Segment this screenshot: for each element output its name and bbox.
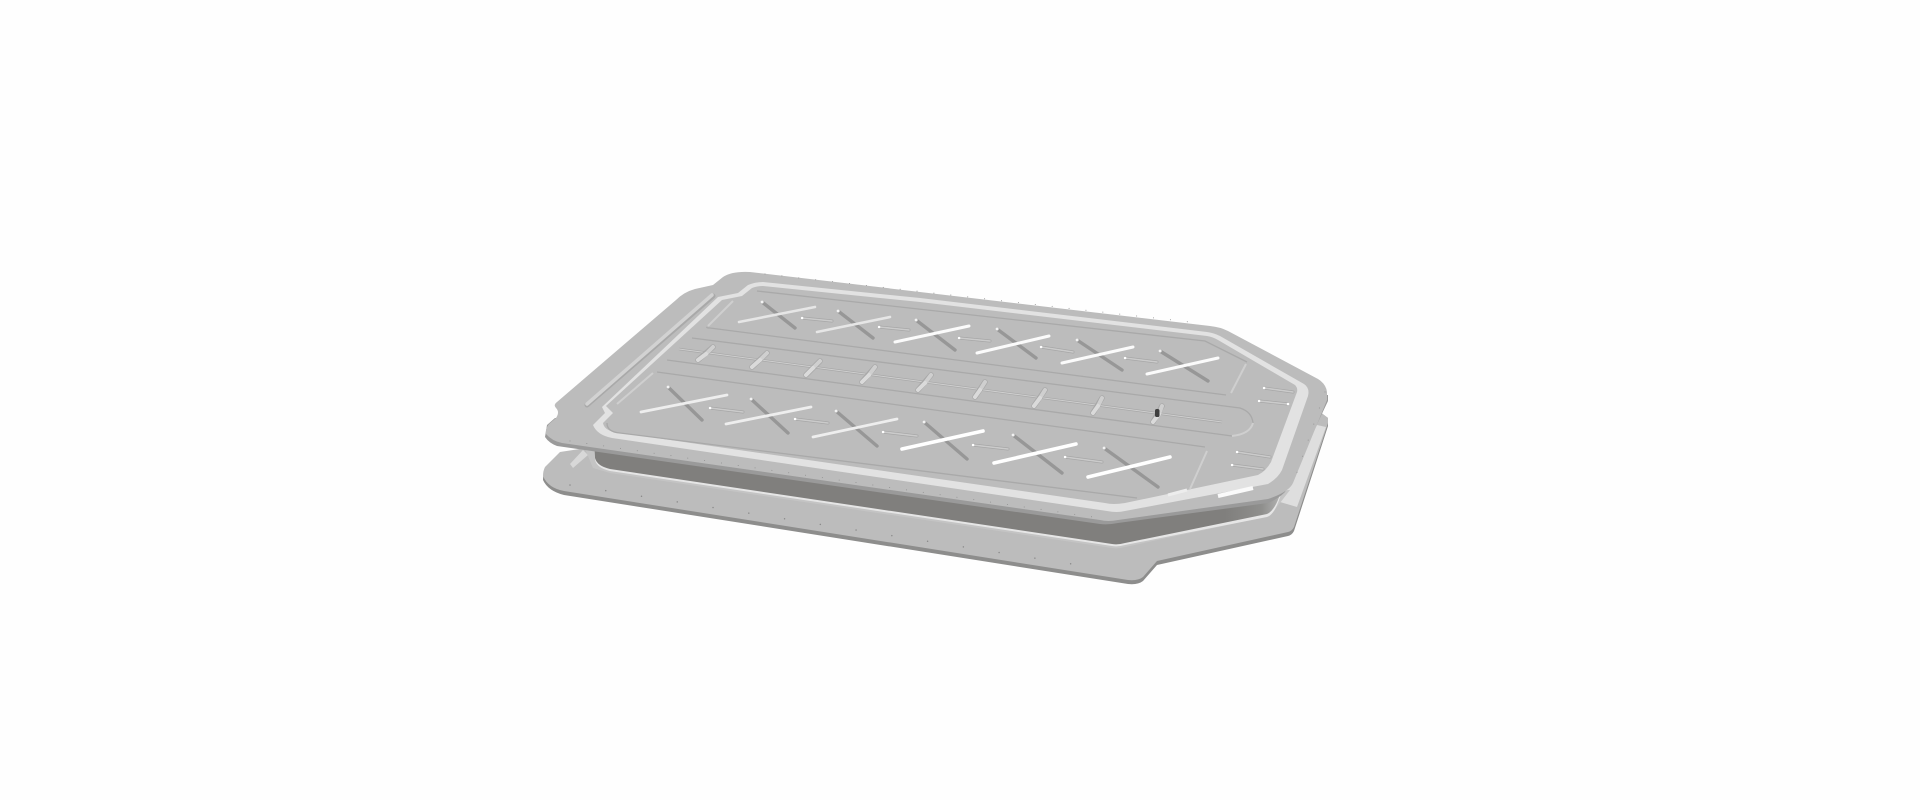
- rear groove: [587, 295, 713, 405]
- white edge highlights: [1218, 488, 1253, 496]
- channel lines: [607, 291, 1253, 498]
- raised ring: [593, 282, 1308, 512]
- flange bolt holes: [570, 274, 1325, 518]
- slots: [710, 318, 1293, 469]
- side tab: [1280, 425, 1326, 507]
- valve fitting: [1155, 409, 1160, 417]
- upper flange: [545, 272, 1328, 524]
- corner tab: [570, 450, 588, 468]
- middle channel line: [679, 349, 1222, 422]
- bolt holes: [570, 485, 1091, 567]
- angled channel highlights: [617, 301, 1253, 489]
- cross braces, white arms: [641, 307, 1218, 477]
- ring edge highlight: [1168, 490, 1187, 495]
- tray side wall: [583, 440, 1290, 548]
- middle ticks: [698, 347, 1162, 422]
- lower tray flange: [543, 400, 1328, 584]
- cross braces, dark arms: [668, 302, 1208, 487]
